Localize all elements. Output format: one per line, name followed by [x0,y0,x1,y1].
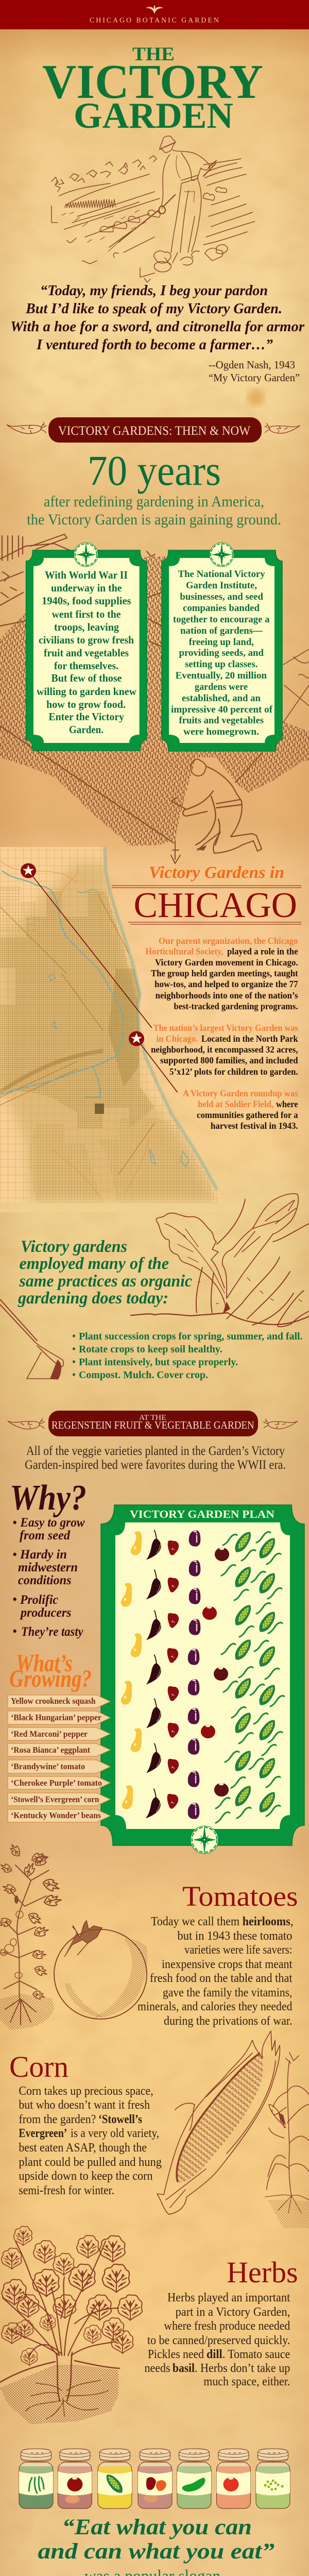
text block: corn: is a very old variety, [71,2127,159,2140]
panel text: underway in the [51,582,122,594]
icon: jar of red tomatoes [216,2449,250,2509]
text block: tomatoes [138,1915,294,2028]
panel: Victory Garden plan [101,1505,304,1854]
panel text: With World War II [45,569,128,581]
opening quotation: “Today, my friends, I beg your pardon [40,282,268,299]
text block: herbs: much space, either. [203,2375,290,2388]
list: reasons why: from seed [20,1529,70,1543]
list: reasons why: Hardy in [20,1548,67,1562]
illustration: gardener with hoe [52,136,254,282]
heading: Victory Gardens in Chicago: CHICAGO [134,886,297,925]
panel text: freeing up land, [189,637,254,648]
plan: black peppers row [146,1530,161,1818]
plan: beans [216,1532,284,1823]
list: varieties grown: ‘Red Marconi’ pepper [11,1729,88,1739]
section banner: Regenstein garden: AT THE [139,1414,166,1422]
map: fade at the foot [0,1193,237,1212]
slogan: “Eat what you can [62,2515,252,2539]
illustration: herb plant [0,2226,142,2424]
icon: compass emblem [210,542,234,567]
quotation attribution: “My Victory Garden” [209,371,300,384]
list: varieties grown [8,1695,110,1822]
panel text [171,569,273,737]
illustration: tomato plant [0,1842,62,2030]
text block: Soldier Field roundup: harvest festival in 1943. [211,1121,298,1131]
bulleted practices [73,1331,303,1381]
text block: nation's largest garden: in Chicago. [157,1033,198,1044]
heading: What's Growing: What’s [16,1650,73,1677]
plan: corn rows [232,1529,279,1815]
panel text: fruit and vegetables [44,647,129,659]
heading: Why: Why? [10,1478,87,1518]
quotation attribution: --Ogden Nash, 1943 [209,359,295,371]
illustration: corn plant [265,2053,309,2228]
text block: corn: from the garden? [19,2113,96,2126]
text block: nation's largest garden [151,1023,298,1077]
text block: Soldier Field roundup: A Victory Garden roundup was [183,1088,298,1098]
text block: herbs: Herbs played an important [167,2291,290,2304]
text block: nation's largest garden: The nation’s largest Victory Garden was [153,1023,298,1033]
title: THE [132,44,175,65]
opening quotation [10,282,305,353]
panel text: were homegrown. [183,726,259,737]
list: varieties grown: ‘Brandywine’ tomato [11,1761,85,1771]
panel text: 1940s, food supplies [42,595,131,607]
text block: Chicago Horticultural Society: Our parent organization, the Chicago [159,936,298,946]
panel text: established, and an [182,693,261,704]
text block: tomatoes: Today we call them [151,1915,239,1928]
text block: herbs: to be canned/preserved quickly. [147,2334,290,2347]
title: VICTORY [42,55,263,109]
text block: Chicago Horticultural Society [145,936,298,1011]
illustration: hand planting seedling [131,1194,309,1327]
panel text: for themselves. [54,659,118,672]
text block: Soldier Field roundup: communities gathered for a [197,1110,298,1120]
list: reasons why: Prolific [20,1593,58,1607]
text block: Soldier Field roundup: held at Soldier Field, [198,1099,273,1109]
heading: Herbs: Herbs [227,2256,298,2289]
text block: tomatoes: during the privations of war. [164,2014,293,2028]
plan title: VICTORY GARDEN PLAN [130,1508,274,1520]
plan: red peppers row [167,1540,179,1809]
map: rivers [0,871,124,1097]
text block: Chicago Horticultural Society: best-tracked gardening programs. [174,1001,298,1011]
text block: corn: but who doesn’t want it fresh [19,2098,150,2112]
text block: herbs: needs [144,2362,170,2375]
panel text: businesses, and seed [180,591,263,602]
icon: botanic garden logo [145,5,164,14]
panel text [37,569,137,736]
text block: corn: semi-fresh for winter. [19,2184,114,2197]
illustration: tomato [54,1921,147,2019]
text block: corn: ‘Stowell’s [98,2113,142,2126]
top banner [0,0,309,29]
text block: herbs: . Herbs don’t take up [195,2362,290,2375]
text block: tomatoes: gave the family the vitamins, [163,1986,293,1999]
text block: nation's largest garden: supported 800 families, and included [160,1055,298,1065]
text block: Chicago Horticultural Society: The group held garden meetings, taught [151,968,298,978]
arrow: line from downtown star [136,1039,177,1092]
text block: herbs: . Tomato sauce [222,2348,290,2361]
arrow: line from first star [28,871,152,1028]
plan: eggplants row [188,1530,200,1819]
text block: herbs: dill [207,2348,222,2361]
text block: tomatoes: , [290,1915,294,1928]
illustration detail: lettuce row [100,187,227,263]
quotation attribution [209,359,300,384]
panel text: nation of gardens— [180,625,263,636]
text block: corn: plant could be pulled and hung [19,2156,162,2169]
text block: Soldier Field roundup [183,1088,298,1131]
illustration: hoe [0,1299,63,1379]
panel text: fruits and vegetables [179,715,264,726]
panel text: how to grow food. [46,698,126,710]
big number: 70 years: 70 years [88,447,221,494]
text block: tomatoes: varieties were life savers: [184,1943,293,1957]
heading: organic practices [18,1238,192,1308]
plan: yellow squash row [121,1531,142,1809]
text block: corn: Corn takes up precious space, [19,2084,153,2098]
icon: compass emblem [74,542,98,567]
title [42,44,263,136]
section banner: then and now: VICTORY GARDENS: THEN & NOW [58,424,250,438]
text block: corn: Evergreen’ [19,2127,67,2140]
bulleted practices: Plant succession crops for spring, summer, and fall. [79,1331,303,1342]
panel text: impressive 40 percent of [171,704,273,715]
icon: jar of corn [98,2449,132,2509]
list: reasons why: Easy to grow [20,1516,85,1530]
text block: nation's largest garden: neighborhood, it encompassed 32 acres, [151,1044,298,1055]
list: varieties grown: Yellow crookneck squash [11,1696,96,1706]
panel: National Victory Garden Institute [162,542,282,751]
slogan [38,2515,274,2564]
heading: Corn: Corn [9,2050,68,2083]
text block: tomatoes: inexpensive crops that meant [162,1958,293,1971]
text block: herbs: where fresh produce needed [164,2319,290,2333]
illustration: kneeling farmer and planted rows [0,534,309,863]
list: reasons why: producers [20,1606,71,1620]
text block: Chicago Horticultural Society: Horticultural Society, [145,946,223,956]
panel text: went first to the [52,608,121,620]
icon: star marker north [21,863,36,878]
bulleted practices: Plant intensively, but space properly. [79,1357,238,1368]
canning jars [19,2449,290,2509]
text block: herbs: basil [173,2362,195,2375]
text block: corn: best eaten ASAP, though the [19,2141,147,2155]
map: dense street grid [0,886,219,1206]
illustration: ear of corn [157,2031,280,2214]
intro text [25,1444,286,1472]
text block: herbs: Pickles need [148,2348,204,2361]
heading: organic practices: employed many of the [20,1255,169,1273]
panel text: troops, leaving [54,621,119,633]
panel text: The National Victory [178,569,265,580]
text block: tomatoes: but in 1943 these tomato [177,1929,292,1943]
panel: World War II story [26,542,147,751]
illustration detail: carrot-top row [65,199,115,208]
icon: compass emblem [191,1825,218,1854]
panel text: But few of those [52,672,122,684]
panel text: companies banded [183,603,260,614]
text block: herbs: part in a Victory Garden, [176,2306,290,2319]
panel text: Eventually, 20 million [176,670,267,681]
text block: nation's largest garden: Located in the North Park [201,1033,298,1044]
icon: star marker downtown [129,1031,144,1046]
subheading: the Victory Garden is again gaining ground. [27,511,281,528]
text block: tomatoes: heirlooms [243,1915,290,1928]
heading: organic practices: Victory gardens [21,1238,127,1256]
plan: tomatoes [201,1547,229,1797]
text block: Chicago Horticultural Society: Victory Garden movement in Chicago. [155,957,298,968]
panel text: setting up classes. [185,659,258,670]
panel text: gardens were [195,682,248,692]
panel text: together to encourage a [173,614,270,625]
bulleted practices: Compost. Mulch. Cover crop. [79,1369,208,1381]
text block: corn: upside down to keep the corn [19,2170,153,2183]
list: varieties grown: ‘Cherokee Purple’ tomato [11,1778,102,1788]
panel text: Enter the Victory [48,710,124,723]
opening quotation: With a hoe for a sword, and citronella for armor [10,318,305,335]
icon: jar of tomatoes [58,2449,92,2509]
section banner: Regenstein garden [8,1411,298,1436]
text block: tomatoes: fresh food on the table and that [150,1972,293,1985]
panel text: civilians to grow fresh [39,634,134,646]
heading: organic practices: gardening does today: [18,1289,168,1308]
text block: corn [19,2084,162,2197]
section banner: Regenstein garden: REGENSTEIN FRUIT & VEGETABLE GARDEN [52,1419,254,1431]
text block: Chicago Horticultural Society: how-tos, and helped to organize the 77 [154,979,298,989]
list: varieties grown: ‘Stowell’s Evergreen’ corn [11,1794,99,1804]
opening quotation: But I’d like to speak of my Victory Garden. [25,300,282,317]
heading: Tomatoes: Tomatoes [182,1880,298,1912]
bulleted practices: Rotate crops to keep soil healthy. [79,1344,222,1355]
banner text: CHICAGO BOTANIC GARDEN [90,16,219,25]
list: varieties grown: ‘Rosa Bianca’ eggplant [11,1745,90,1755]
icon: jar of pickles [177,2449,211,2509]
subheading: after redefining gardening in America, [44,493,264,510]
list: reasons why [13,1516,85,1639]
text block: Chicago Horticultural Society: played a role in the [227,946,298,956]
illustration detail: leafy crop row [52,156,157,192]
heading: organic practices: same practices as organic [19,1272,192,1291]
text block: herbs [144,2291,290,2388]
heading: What's Growing [9,1650,92,1692]
section banner: then and now [7,417,300,443]
text block: tomatoes: minerals, and calories they needed [138,2000,293,2013]
opening quotation: I ventured forth to become a farmer…” [36,336,273,353]
slogan: and can what you eat” [38,2539,274,2564]
map of Chicago [0,847,237,1212]
list: reasons why: midwestern [18,1561,78,1574]
list: reasons why: conditions [18,1573,71,1587]
text block: Soldier Field roundup: where [276,1099,298,1109]
list: varieties grown: ‘Kentucky Wonder’ beans [11,1810,101,1820]
panel text: Garden. [69,723,104,736]
heading: Victory Gardens in Chicago [112,863,302,925]
icon: jar of beans [19,2449,53,2509]
panel text: providing seeds, and [179,648,264,658]
heading: Victory Gardens in Chicago: Victory Gardens in [149,863,284,882]
icon: jar of peppers [138,2449,172,2509]
icon: jar of peas [256,2449,290,2509]
heading: What's Growing: Growing? [9,1665,92,1692]
title: GARDEN [74,96,233,136]
panel text: Garden Institute, [186,580,257,591]
list: varieties grown: ‘Black Hungarian’ pepper [11,1713,101,1722]
panel text: willing to garden knew [37,685,137,698]
text block: Chicago Horticultural Society: neighborhoods into one of the nation’s [156,990,298,1001]
subheading [27,493,281,528]
text block: nation's largest garden: 5’x12’ plots for children to garden. [169,1066,298,1077]
list: reasons why: They’re tasty [21,1625,83,1639]
map: soft tone of built-up areas [0,863,216,1206]
